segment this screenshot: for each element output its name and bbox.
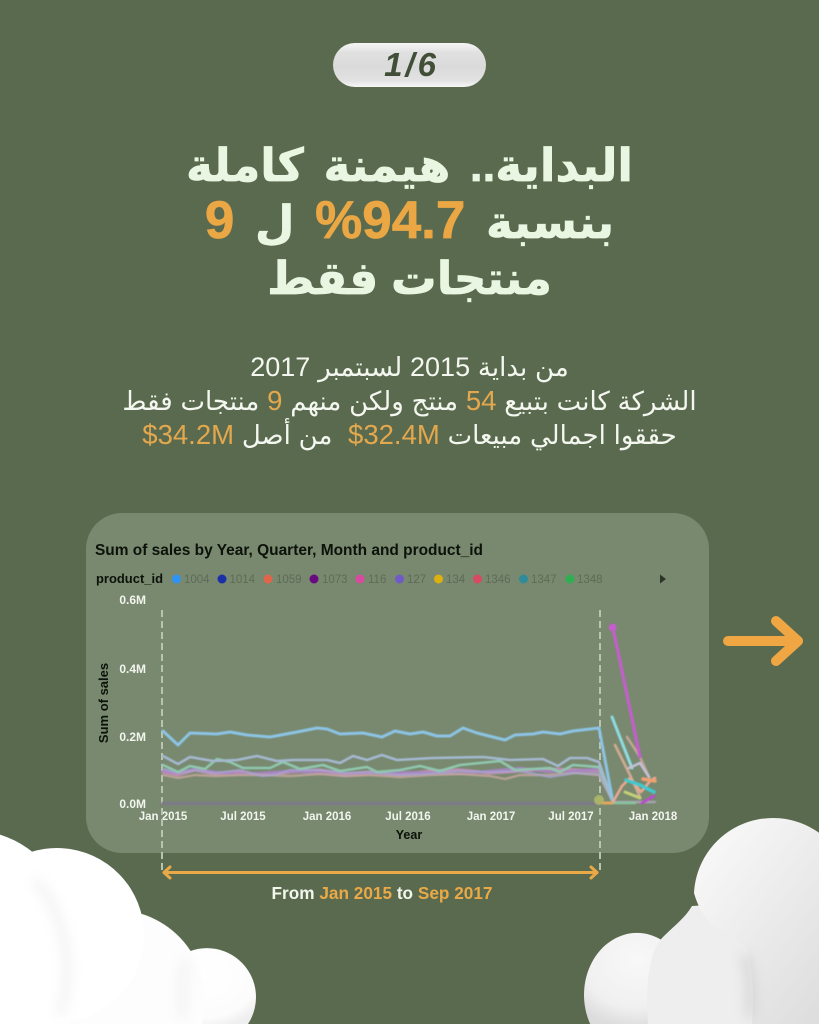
intro text: من بداية 2015 لسبتمبر 2017 — [250, 352, 569, 382]
x axis labels: Jan 2017 — [467, 811, 515, 823]
legend — [96, 571, 666, 586]
legend: 1347 — [531, 574, 557, 586]
legend: 1059 — [276, 574, 302, 586]
y axis labels — [119, 593, 146, 811]
range caption: From Jan 2015 to Sep 2017 — [272, 883, 492, 903]
legend: 134 — [446, 574, 466, 586]
legend: 1004 — [184, 574, 210, 586]
next arrow — [728, 621, 798, 661]
dashed range markers — [162, 610, 600, 870]
intro text — [122, 352, 697, 450]
legend: 1073 — [322, 574, 348, 586]
chart background — [86, 513, 709, 853]
page number pill: 1/6 — [384, 46, 439, 83]
data lines — [163, 728, 613, 804]
y axis title: Sum of sales — [96, 663, 111, 743]
intro text: الشركة كانت بتبيع 54 منتج ولكن منهم 9 منتجات فقط — [122, 385, 697, 416]
panel: line chart — [86, 513, 709, 870]
title: منتجات فقط — [267, 253, 552, 304]
x axis labels: Jan 2018 — [629, 811, 678, 823]
intro text: حققوا اجمالي مبيعات $32.4M من أصل $34.2M — [142, 419, 677, 450]
x axis title: Year — [396, 828, 422, 842]
range arrow — [164, 867, 597, 878]
title — [186, 140, 633, 304]
legend: 127 — [407, 574, 426, 586]
legend: product_id — [96, 571, 163, 586]
y axis labels: 0.4M — [119, 662, 146, 676]
left cloud — [0, 835, 256, 1024]
right end data cluster — [594, 624, 655, 805]
y axis labels: 0.2M — [119, 730, 146, 744]
right cloud — [584, 818, 819, 1024]
x axis labels: Jul 2016 — [385, 811, 431, 823]
legend: 1346 — [485, 574, 511, 586]
x axis labels: Jul 2017 — [548, 811, 594, 823]
x axis labels: Jul 2015 — [220, 811, 266, 823]
y axis labels: 0.0M — [119, 797, 146, 811]
title: بنسبة %94.7 ل 9 — [205, 191, 614, 250]
legend: 116 — [368, 574, 386, 586]
chart title: Sum of sales by Year, Quarter, Month and product_id — [95, 542, 483, 559]
x axis labels: Jan 2016 — [303, 811, 351, 823]
page number pill — [333, 43, 486, 87]
legend: 1348 — [577, 574, 603, 586]
y axis labels: 0.6M — [119, 593, 146, 607]
title: البداية.. هيمنة كاملة — [186, 140, 633, 191]
x axis labels: Jan 2015 — [139, 811, 188, 823]
x axis labels — [139, 811, 678, 823]
legend: 1014 — [230, 574, 256, 586]
